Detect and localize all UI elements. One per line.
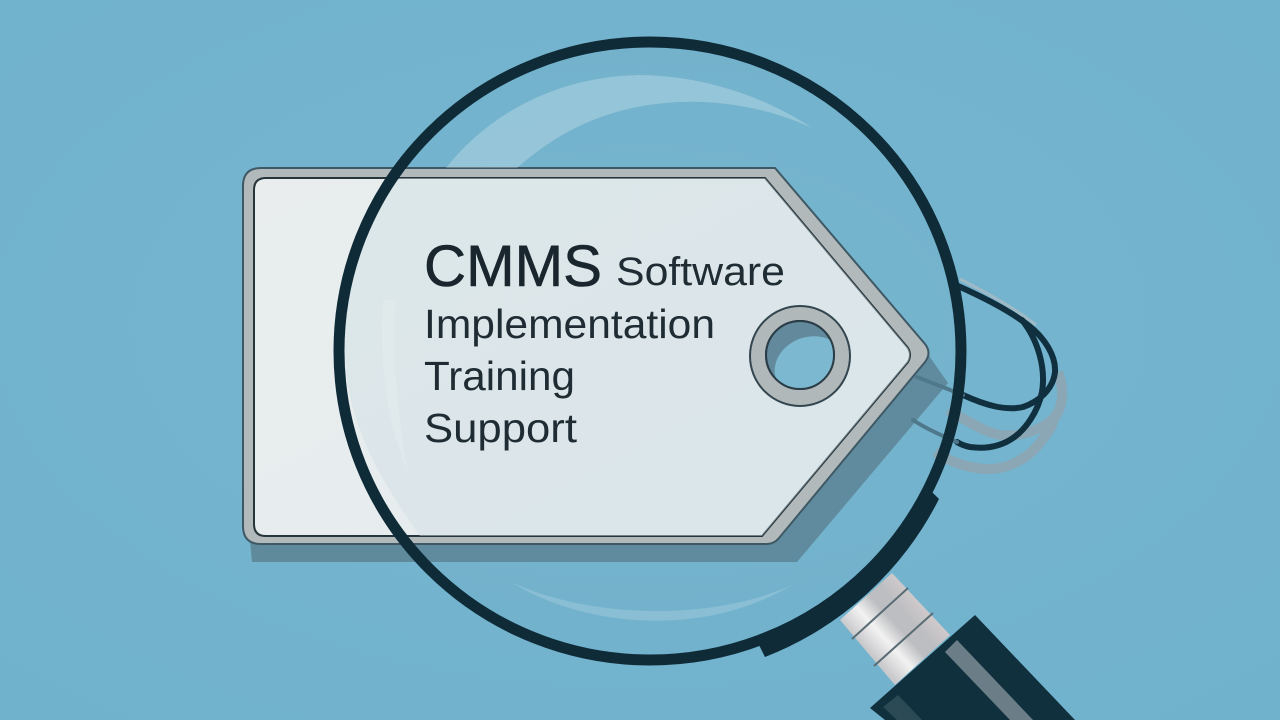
word Software: Software xyxy=(616,250,785,294)
word Implementation: Implementation xyxy=(424,301,715,347)
magnifying glass xyxy=(339,42,1075,720)
bottom glare xyxy=(513,583,792,621)
heading CMMS: CMMS xyxy=(424,234,602,299)
tag face xyxy=(254,178,910,536)
lens glare xyxy=(382,75,812,621)
lens tint xyxy=(339,42,961,660)
lens rim xyxy=(339,42,961,660)
side glare xyxy=(382,300,408,472)
ferrule xyxy=(840,573,950,685)
string loops xyxy=(913,286,1055,448)
eyelet xyxy=(750,306,854,408)
word Support: Support xyxy=(424,405,578,451)
word Training: Training xyxy=(424,353,575,399)
handle xyxy=(870,615,1075,720)
tag shadow xyxy=(250,350,948,562)
lens tint on tag xyxy=(344,178,910,536)
price tag xyxy=(243,168,928,544)
rim collar xyxy=(755,484,939,657)
tag text xyxy=(424,234,785,451)
top glare xyxy=(446,75,812,168)
string shadows xyxy=(935,372,1062,469)
string highlight xyxy=(960,279,1036,325)
tag body xyxy=(243,168,928,544)
